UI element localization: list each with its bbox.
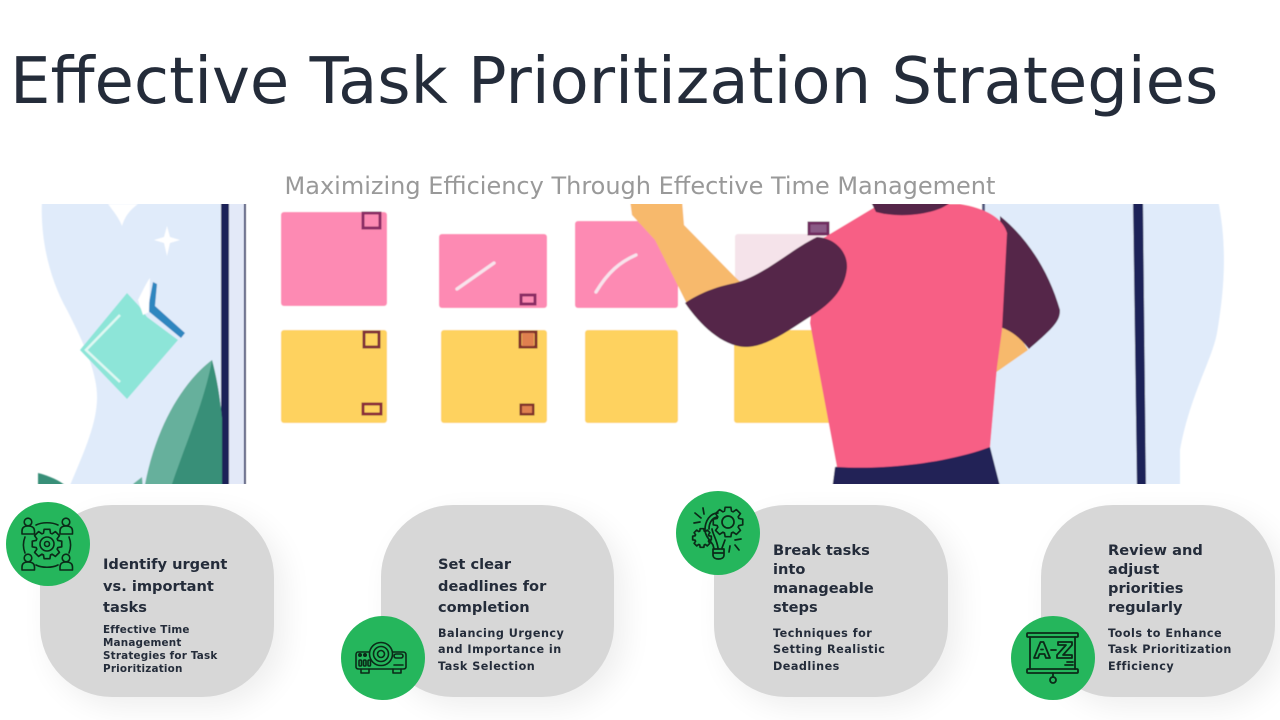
panel: card 4 review and adjust bbox=[1041, 505, 1275, 697]
card 3 heading: manageable bbox=[773, 580, 874, 597]
card 1 description: Effective Time bbox=[103, 624, 190, 636]
panel: card 1 identify urgent bbox=[40, 505, 274, 697]
card 3 description: Setting Realistic bbox=[773, 643, 885, 656]
right background blob bbox=[980, 200, 1224, 490]
card 2 heading: Set clear bbox=[438, 556, 511, 573]
board surface bbox=[246, 200, 984, 490]
icon: team around gear bbox=[6, 502, 90, 586]
note markers bbox=[363, 213, 828, 414]
person bbox=[630, 200, 1060, 490]
panel: card 2 set clear deadlines bbox=[381, 505, 614, 697]
hero illustration: person at task board bbox=[37, 204, 1224, 484]
star sparkles bbox=[108, 204, 138, 226]
card 2 description bbox=[438, 626, 564, 672]
card 3 description bbox=[773, 626, 885, 672]
board post right bbox=[1133, 200, 1146, 490]
card 3 heading: steps bbox=[773, 599, 818, 616]
card 1 description: Management bbox=[103, 637, 181, 649]
card 2 heading: deadlines for bbox=[438, 578, 546, 594]
card 4 heading: priorities bbox=[1108, 580, 1183, 597]
card 1 heading: tasks bbox=[103, 599, 147, 616]
card 4 description: Efficiency bbox=[1108, 660, 1174, 672]
card 3 heading: Break tasks bbox=[773, 542, 870, 559]
card 2 description: Balancing Urgency bbox=[438, 626, 564, 640]
card 1 heading bbox=[103, 556, 227, 616]
card 4 heading: Review and bbox=[1108, 542, 1203, 559]
card 3 description: Techniques for bbox=[773, 626, 872, 640]
card 1 description: Strategies for Task bbox=[103, 650, 218, 662]
card 2 description: Task Selection bbox=[438, 660, 535, 672]
note highlights bbox=[457, 263, 494, 289]
yellow sticky notes bbox=[281, 330, 844, 423]
left background blob bbox=[42, 200, 225, 490]
card 2 description: and Importance in bbox=[438, 643, 562, 656]
icon: projector bbox=[341, 616, 425, 700]
icon: A to Z presentation board bbox=[1011, 616, 1095, 700]
icon: lightbulb with gears bbox=[676, 491, 760, 575]
card 2 heading: completion bbox=[438, 599, 530, 616]
board frame left bbox=[221, 200, 229, 490]
card 1 heading: vs. important bbox=[103, 578, 214, 594]
title: Effective Task Prioritization Strategies bbox=[10, 45, 1218, 119]
card 3 heading bbox=[773, 542, 874, 616]
leaves bbox=[38, 360, 222, 490]
card 4 description: Tools to Enhance bbox=[1108, 626, 1222, 640]
panel: card 3 break tasks bbox=[714, 505, 948, 697]
card 1 description bbox=[103, 624, 218, 675]
card 4 heading: adjust bbox=[1108, 561, 1159, 578]
diamond note bbox=[80, 278, 185, 399]
card 3 heading: into bbox=[773, 561, 805, 578]
card 4 description bbox=[1108, 626, 1232, 672]
pink sticky notes bbox=[281, 212, 678, 308]
card 4 description: Task Prioritization bbox=[1108, 643, 1232, 656]
card 2 heading bbox=[438, 556, 546, 616]
card 3 description: Deadlines bbox=[773, 660, 840, 672]
card 4 heading: regularly bbox=[1108, 599, 1182, 616]
card 4 heading bbox=[1108, 542, 1203, 616]
card 1 description: Prioritization bbox=[103, 663, 183, 675]
subtitle: Maximizing Efficiency Through Effective Time Management bbox=[285, 172, 995, 200]
card 1 heading: Identify urgent bbox=[103, 556, 227, 573]
